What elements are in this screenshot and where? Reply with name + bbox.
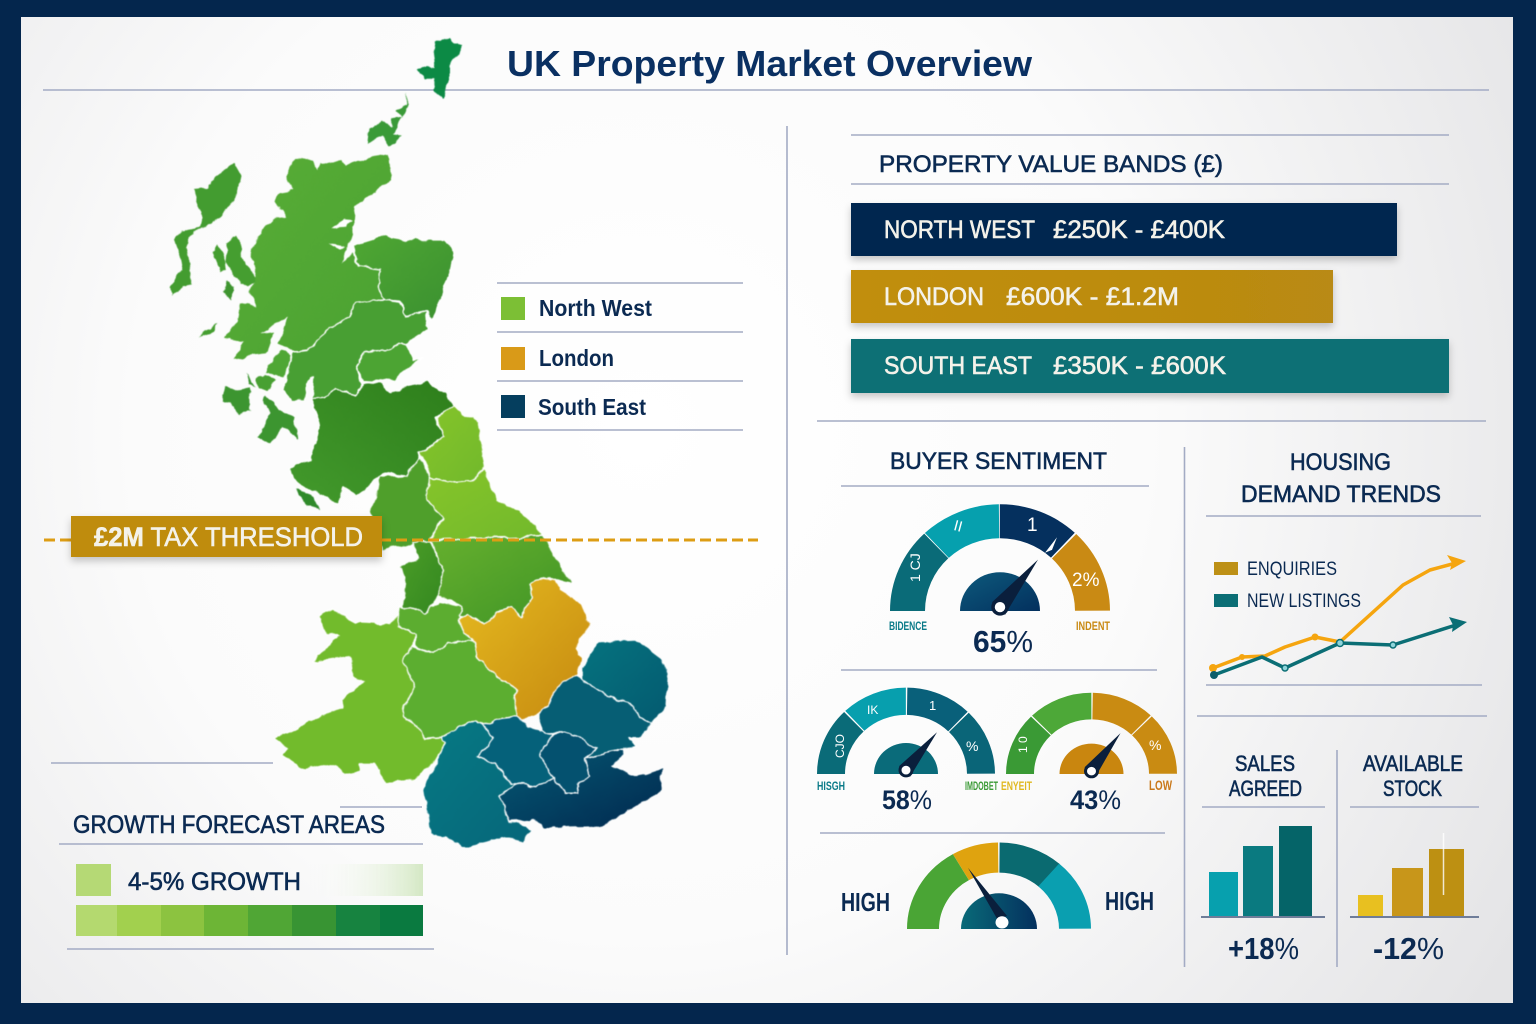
map: Scotland [170, 36, 462, 510]
panel: sales agreed: +18% [1228, 931, 1299, 966]
region: Essex [537, 677, 652, 758]
gauge: 58%: IK [867, 703, 878, 717]
gauge: 65%: 1 [1027, 515, 1038, 536]
panel: sales agreed: AGREED [1229, 776, 1302, 801]
panel: housing demand trends [1206, 449, 1482, 685]
gauge: 65%: 1 CJ [907, 553, 923, 582]
bar: North West: NORTH WEST [884, 216, 1035, 244]
gauge: 65%: 65% [973, 624, 1033, 659]
tax threshold banner [44, 516, 758, 557]
heading: housing demand [1241, 449, 1441, 508]
island: Islay and Jura [222, 387, 251, 414]
line chart [1206, 555, 1482, 685]
bar: South East: £350K - £600K [1053, 352, 1226, 380]
title: UK Property Market Overview [507, 43, 1033, 84]
panel: growth forecast areas: 4-5% GROWTH [128, 868, 301, 896]
panel: buyer sentiment [817, 448, 1173, 929]
region: South West [423, 722, 533, 847]
panel: available stock: AVAILABLE [1363, 751, 1463, 776]
region: East of England [582, 640, 668, 723]
panel: sales agreed [1201, 751, 1325, 966]
region: Wales [275, 608, 447, 783]
gauge: 65%: 2% [1072, 570, 1100, 591]
bar: North West: £250K - £400K [1053, 216, 1225, 244]
bar: North West [851, 203, 1397, 256]
region: Midlands south [403, 640, 518, 738]
region: Yorkshire [427, 468, 543, 539]
gauge: 43%: 43% [1070, 785, 1121, 815]
bar: London: LONDON [884, 283, 984, 311]
heading: housing demand: DEMAND TRENDS [1241, 481, 1441, 508]
legend: regions: London [539, 345, 614, 371]
region: Wessex [478, 717, 553, 787]
region: Grampian [353, 235, 455, 320]
map: England and Wales [275, 407, 668, 847]
panel: growth forecast areas [51, 763, 434, 949]
heading: buyer sentiment: BUYER SENTIMENT [890, 448, 1107, 475]
gauge: 43%: LOW [1149, 777, 1173, 793]
region: Humberside [430, 537, 573, 625]
region: East Midlands gold [458, 578, 591, 723]
bar: South East: SOUTH EAST [884, 352, 1032, 380]
gauge: 43%: ENYEIT [1001, 779, 1032, 793]
gauge: 58%: 1 [929, 698, 936, 713]
gauge: 43% [1001, 706, 1173, 815]
gauge: 65%: BIDENCE [889, 619, 927, 633]
region: Southern Scotland [290, 380, 455, 503]
panel: sales agreed: SALES [1235, 751, 1295, 776]
gauge: 58%: % [966, 738, 978, 754]
heading: housing demand: HOUSING [1290, 449, 1391, 476]
legend: regions: North West [539, 295, 652, 321]
island: Outer Hebrides [170, 163, 241, 297]
region: West Midlands north [398, 602, 473, 653]
gauge: 58%: HISGH [817, 779, 845, 793]
region: Tayside and Central [283, 300, 428, 400]
growth colour scale [76, 905, 423, 936]
panel: available stock [1350, 751, 1479, 966]
region: Highlands [225, 154, 391, 360]
chart legend: NEW LISTINGS [1247, 591, 1361, 612]
bar: London: £600K - £1.2M [1006, 283, 1179, 311]
gauge: 58%: IMDOBET [965, 779, 998, 793]
legend: regions: South East [538, 394, 646, 420]
heading: growth forecast: GROWTH FORECAST AREAS [73, 811, 385, 839]
UK map [170, 36, 668, 847]
region: Kent and Sussex [500, 750, 663, 828]
region: Thames Valley [540, 733, 595, 793]
bar: South East [851, 339, 1449, 393]
bar: London [851, 270, 1333, 323]
region: Fife [357, 343, 423, 382]
panel: available stock: -12% [1373, 931, 1444, 966]
gauge: 58% [817, 698, 998, 815]
legend: regions [497, 283, 743, 430]
panel: available stock: STOCK [1383, 776, 1442, 801]
island: Orkney [368, 93, 407, 147]
gauge: 43%: % [1149, 737, 1161, 753]
island: Shetland [417, 36, 462, 98]
gauge: high [841, 858, 1154, 929]
gauge: 65%: INDENT [1076, 619, 1111, 633]
gauge: 65%: II [952, 517, 964, 536]
tax threshold banner: £2M TAX THRESHOLD [94, 522, 363, 552]
heading: property value bands: PROPERTY VALUE BANDS (£) [879, 151, 1223, 178]
chart legend: ENQUIRIES [1247, 559, 1337, 580]
region: Lancashire [400, 542, 443, 615]
panel: property value bands [851, 135, 1449, 393]
gauge: 58%: CJO [833, 734, 847, 758]
gauge: 65% [889, 515, 1111, 659]
region: North East [420, 407, 485, 482]
region: Cumbria [370, 460, 443, 550]
gauge: 43%: 1 0 [1016, 736, 1030, 753]
island: Skye [225, 237, 257, 287]
gauge: high: HIGH [1105, 886, 1154, 916]
peninsula: Kintyre [258, 395, 297, 443]
chart legend [1214, 559, 1361, 612]
gauge: 58%: 58% [882, 785, 932, 815]
gauge: high: HIGH [841, 887, 890, 917]
